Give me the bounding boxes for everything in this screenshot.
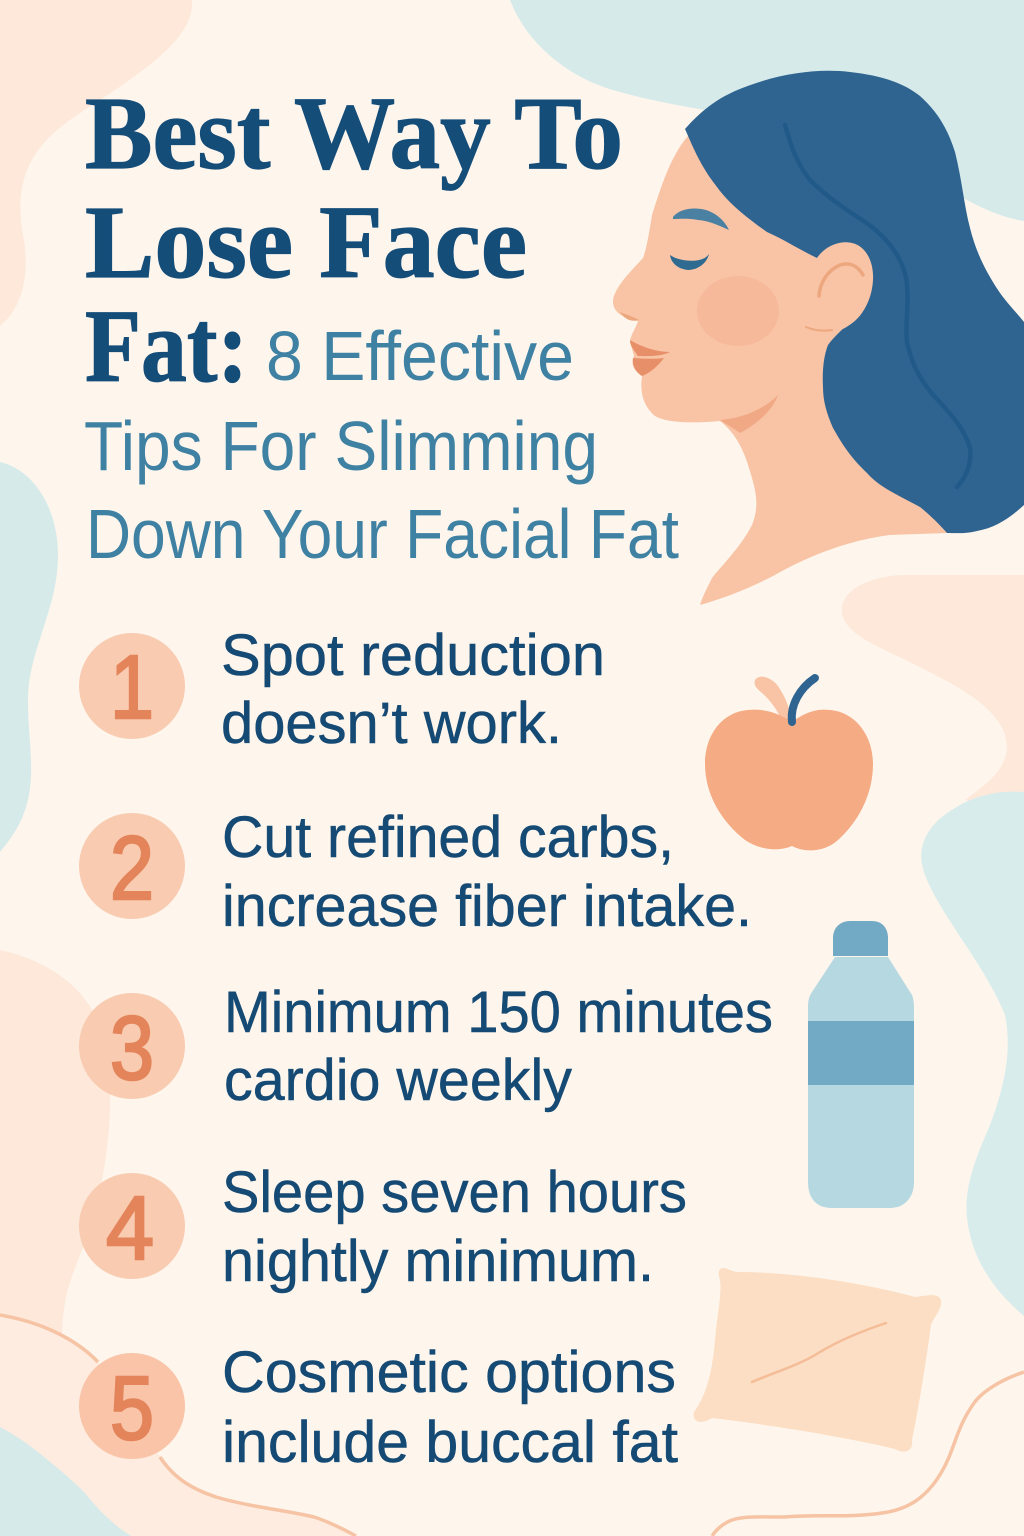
illustration: woman profile — [613, 71, 1024, 605]
subtitle: Tips For Slimming — [84, 407, 598, 485]
tip 5 — [79, 1340, 678, 1475]
decorative curve lines — [0, 1315, 1024, 1536]
bottle body — [808, 957, 914, 1208]
hair strand — [785, 125, 970, 487]
ear lobe line — [806, 327, 832, 331]
apple stem — [792, 678, 815, 722]
title — [85, 76, 623, 404]
ear inner line — [819, 264, 863, 296]
tip 2: 2 — [110, 819, 154, 919]
nostril — [620, 312, 639, 321]
pillow crease — [752, 1323, 886, 1382]
tip 3 — [79, 980, 773, 1113]
icon: pillow — [694, 1268, 941, 1452]
tip 3: Minimum 150 minutes — [224, 980, 773, 1045]
icon: apple — [705, 677, 873, 850]
eyebrow — [673, 208, 729, 230]
ear — [800, 242, 873, 332]
bottle cap — [833, 921, 888, 956]
icon: water bottle — [808, 921, 914, 1208]
subtitle — [84, 317, 679, 573]
apple leaf — [754, 677, 792, 724]
title: Lose Face — [85, 185, 527, 300]
closed eye — [670, 254, 709, 270]
cheek blush — [697, 276, 779, 346]
tip 5: 5 — [110, 1359, 154, 1459]
subtitle: 8 Effective — [266, 317, 574, 395]
face and neck — [613, 132, 960, 605]
tip 1 — [79, 623, 605, 756]
title: Best Way To — [85, 76, 623, 191]
tip 2: increase fiber intake. — [222, 874, 752, 939]
tip 1: 1 — [110, 638, 154, 738]
tip 4: 4 — [106, 1179, 154, 1279]
tip 4: Sleep seven hours — [222, 1160, 687, 1225]
neck shadow — [720, 395, 778, 433]
subtitle: Down Your Facial Fat — [86, 495, 679, 573]
tip 5: Cosmetic options — [222, 1340, 676, 1405]
tip 3: 3 — [110, 999, 154, 1099]
title: Fat: — [85, 289, 248, 404]
tip 1: doesn’t work. — [221, 691, 562, 756]
pillow body — [694, 1268, 941, 1452]
tip 1: Spot reduction — [221, 623, 605, 688]
bottle label band — [808, 1021, 914, 1085]
tip 2 — [79, 805, 752, 939]
tip 2: Cut refined carbs, — [222, 805, 674, 870]
tip 3: cardio weekly — [224, 1048, 572, 1113]
tip 4 — [79, 1160, 687, 1294]
hair — [685, 71, 1024, 533]
tip 4: nightly minimum. — [222, 1229, 654, 1294]
apple body — [705, 710, 873, 850]
tip 5: include buccal fat — [222, 1410, 678, 1475]
lips — [630, 340, 670, 376]
